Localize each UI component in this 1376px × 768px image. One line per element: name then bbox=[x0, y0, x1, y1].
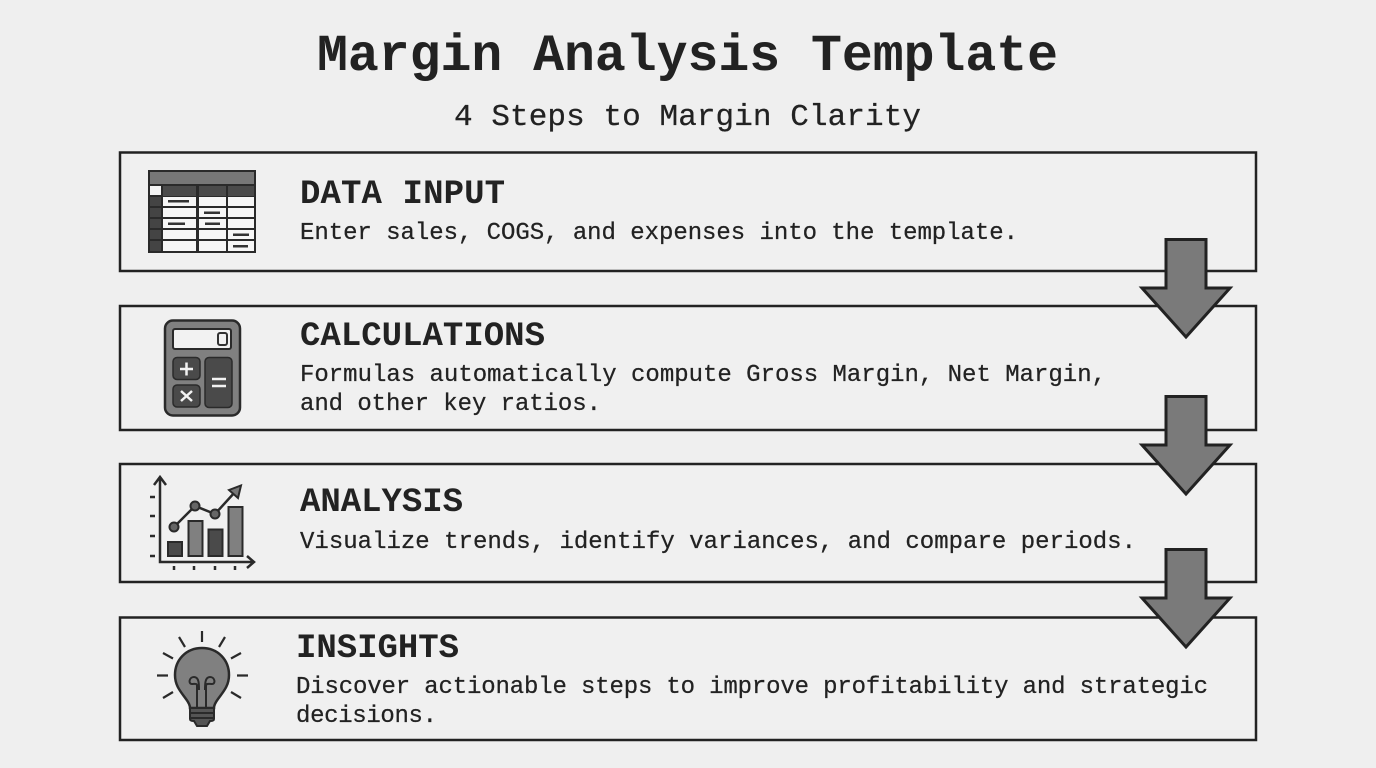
icon: calculator bbox=[165, 320, 240, 416]
text: insights description: Discover actionable steps to improve profitability and strategic bbox=[296, 674, 1208, 701]
text: insights description: decisions. bbox=[296, 703, 437, 730]
text: data input description: Enter sales, COGS, and expenses into the template. bbox=[300, 220, 1018, 247]
heading: data input: DATA INPUT bbox=[300, 176, 505, 214]
panel: calculations bbox=[120, 306, 1256, 430]
arrow: analysis to insights bbox=[1142, 550, 1230, 647]
arrow: calculations to analysis bbox=[1142, 396, 1230, 494]
panel: data input bbox=[120, 152, 1256, 271]
icon: spreadsheet table bbox=[148, 170, 256, 253]
heading: insights: INSIGHTS bbox=[296, 630, 459, 668]
panel: analysis bbox=[120, 464, 1256, 582]
panel: insights bbox=[120, 618, 1256, 740]
subtitle: 4 Steps to Margin Clarity bbox=[454, 100, 921, 135]
heading: analysis: ANALYSIS bbox=[300, 484, 463, 522]
heading: calculations: CALCULATIONS bbox=[300, 318, 545, 356]
icon: chart with trend line bbox=[150, 477, 254, 570]
arrow: data input to calculations bbox=[1142, 240, 1230, 337]
text: insights description bbox=[296, 674, 1208, 730]
text: calculations description: and other key ratios. bbox=[300, 391, 601, 418]
text: analysis description: Visualize trends, identify variances, and compare periods. bbox=[300, 529, 1136, 556]
text: calculations description bbox=[300, 362, 1106, 418]
title: Margin Analysis Template bbox=[317, 28, 1058, 86]
icon: light bulb bbox=[157, 631, 248, 726]
text: calculations description: Formulas automatically compute Gross Margin, Net Margin, bbox=[300, 362, 1106, 389]
